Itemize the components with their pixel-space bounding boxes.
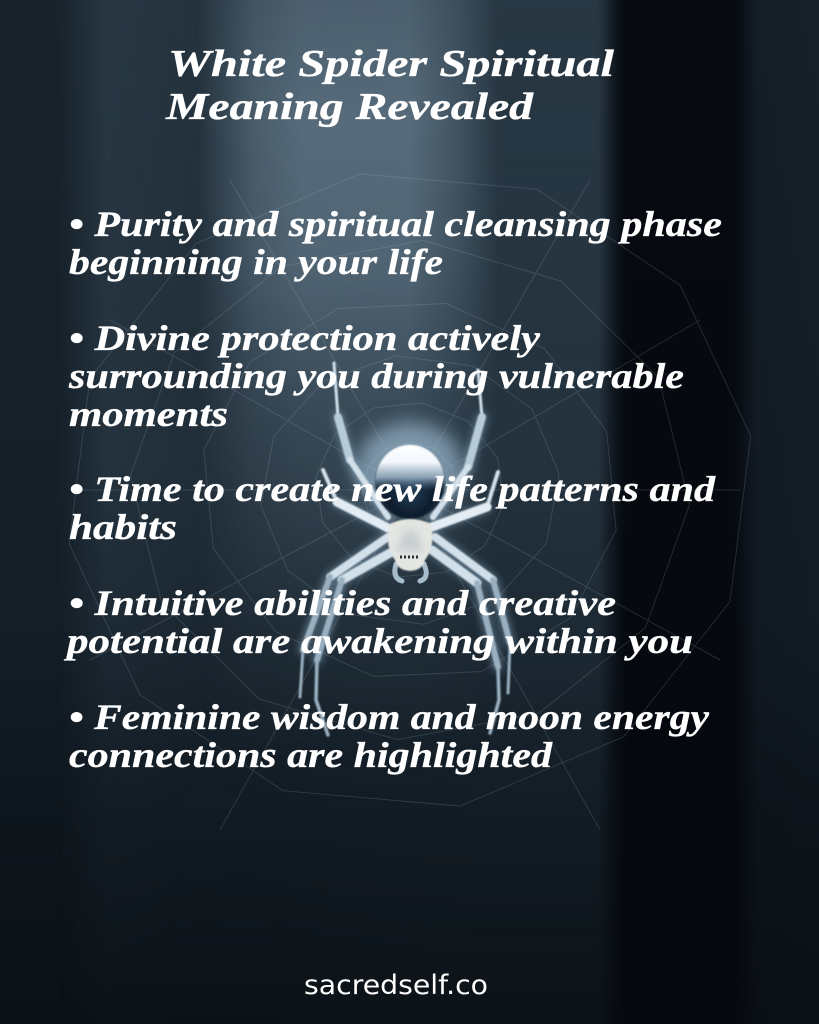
bullet: protection: surrounding you during vulnerable [68, 356, 684, 396]
bullet: feminine wisdom: connections are highlighted [69, 735, 553, 775]
bullet: protection [68, 318, 684, 434]
bullet: protection: moments [69, 394, 228, 434]
bullet: intuition [63, 583, 693, 661]
spider body [388, 519, 433, 571]
spider abdomen [375, 445, 445, 519]
footer: website: sacredself.co [304, 970, 488, 1001]
spider illustration [300, 363, 510, 735]
spider legs [300, 363, 510, 735]
title: Meaning Revealed [165, 86, 534, 128]
bullet: feminine wisdom: • Feminine wisdom and moon energy [69, 697, 710, 737]
spider web [19, 120, 801, 860]
bullet: feminine wisdom [69, 697, 710, 775]
title: White Spider Spiritual [168, 43, 615, 85]
bullet: purity [69, 204, 722, 282]
spider glow [356, 422, 464, 514]
bullet: purity: beginning in your life [69, 242, 443, 282]
bullet: intuition: potential are awakening within you [63, 621, 693, 661]
bullet: life patterns: • Time to create new life patterns and [69, 469, 716, 509]
bullet: life patterns: habits [69, 507, 177, 547]
bullet: intuition: • Intuitive abilities and creative [69, 583, 616, 623]
bullet: purity: • Purity and spiritual cleansing phase [69, 204, 722, 244]
title [165, 43, 615, 128]
spider palps [395, 564, 426, 581]
bullet: protection: • Divine protection actively [69, 318, 541, 358]
bullet: life patterns [69, 469, 716, 547]
